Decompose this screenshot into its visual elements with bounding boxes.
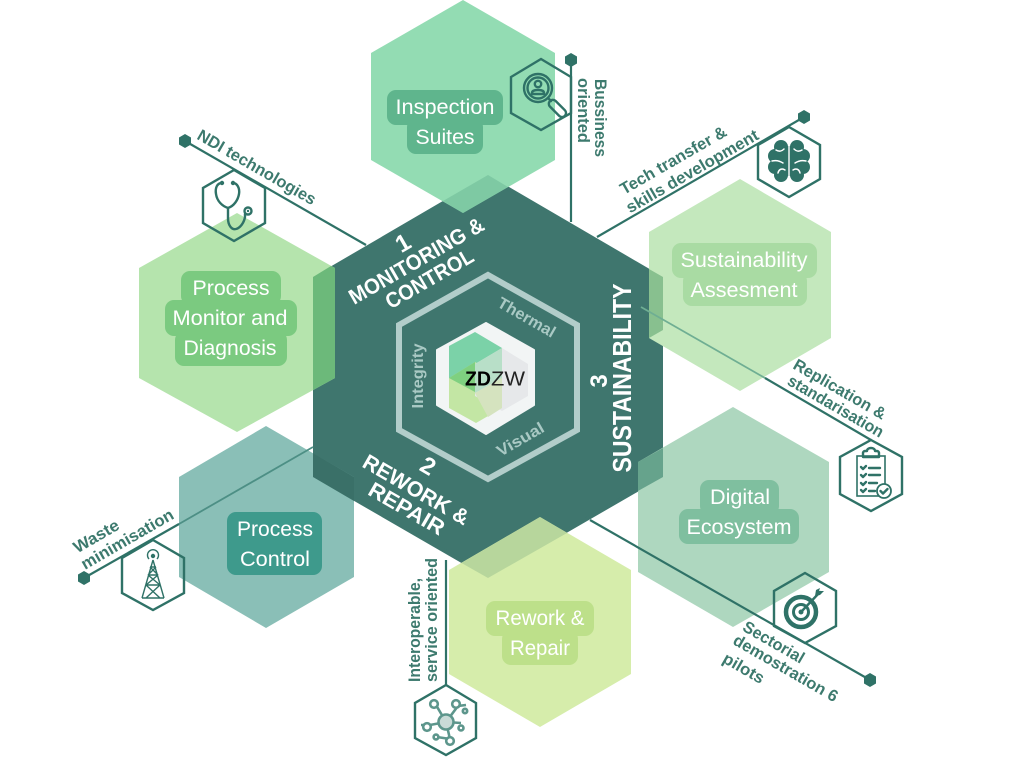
- label: Sectorial demostration 6 pilots: Sectorial: [740, 618, 807, 667]
- label: Bussiness oriented: [574, 78, 609, 157]
- panel: Process Control: Process: [237, 518, 313, 541]
- inner hexagon outline: [399, 275, 577, 479]
- panel: Digital Ecosystem: [638, 407, 829, 627]
- connector: Replication: [641, 307, 871, 440]
- icon: brain: [758, 127, 820, 197]
- icon: network nodes: [415, 685, 476, 755]
- panel: Process Control: [179, 426, 354, 628]
- panel: Sustainability Assesment: Sustainability: [680, 249, 808, 272]
- ZDZW logo: ZW: [491, 368, 525, 390]
- label: Tech transfer and skills development: skills development: [623, 126, 762, 217]
- label: Thermal: Thermal: [494, 295, 558, 341]
- panel: Rework and Repair: Repair: [510, 637, 570, 660]
- panel: Inspection Suites: Inspection: [396, 96, 494, 119]
- panel: Digital Ecosystem: Ecosystem: [686, 516, 792, 539]
- panel: Process Monitor and Diagnosis: Process: [192, 277, 270, 300]
- heading: 2 Rework and Repair: 2: [415, 451, 440, 482]
- label: Waste minimisation: minimisation: [78, 506, 177, 573]
- panel: Rework and Repair: [449, 517, 631, 727]
- heading: 3 Sustainability: [586, 284, 637, 472]
- heading: 1 Monitoring and Control: CONTROL: [381, 244, 478, 314]
- heading: 3 Sustainability: SUSTAINABILITY: [607, 284, 637, 472]
- panel: central hexagon: [315, 177, 661, 576]
- icon: transmission tower: [122, 540, 184, 610]
- label: Interoperable, service oriented: service oriented: [423, 558, 441, 682]
- icon: stethoscope: [203, 170, 265, 241]
- label: Integrity: Integrity: [410, 343, 427, 408]
- label: Interoperable, service oriented: Interoperable,: [406, 578, 424, 682]
- ZDZW logo: [437, 323, 534, 434]
- icon: magnifier person: [511, 59, 571, 130]
- connector: Sectorial demonstration: [590, 520, 876, 687]
- connector: Bussiness oriented: [565, 53, 577, 222]
- ZDZW logo: ZD: [465, 368, 491, 390]
- connector: Waste minimisation: [78, 447, 313, 585]
- heading: 2 Rework and Repair: REPAIR: [364, 478, 449, 541]
- panel: Sustainability Assesment: Assesment: [690, 279, 798, 302]
- panel: Process Monitor and Diagnosis: Monitor and: [172, 307, 288, 330]
- label: Sectorial demostration 6 pilots: demostration 6: [730, 631, 841, 706]
- panel: Inspection Suites: [371, 0, 555, 213]
- label: Bussiness oriented: Bussiness: [591, 79, 609, 157]
- label: Replication and standarisation: Replication &: [790, 356, 889, 424]
- panel: Sustainability Assesment: [649, 179, 831, 391]
- icon: clipboard check: [840, 440, 902, 511]
- panel: Process Control: Control: [240, 548, 310, 571]
- label: Replication and standarisation: standarisation: [784, 372, 887, 441]
- connector: NDI technologies: [179, 134, 366, 245]
- heading: 1 Monitoring and Control: 1: [391, 228, 416, 259]
- connector: Interoperable: [445, 560, 447, 685]
- heading: 1 Monitoring and Control: MONITORING &: [345, 213, 488, 309]
- heading: 3 Sustainability: 3: [586, 374, 613, 388]
- panel: Process Monitor and Diagnosis: [139, 213, 335, 432]
- label: Tech transfer and skills development: Tech transfer &: [617, 123, 730, 198]
- panel: Rework and Repair: Rework &: [496, 607, 584, 630]
- icon: target: [774, 573, 836, 643]
- label: Visual: Visual: [494, 420, 548, 460]
- panel: Process Monitor and Diagnosis: Diagnosis: [184, 337, 276, 360]
- heading: 2 Rework and Repair: REWORK &: [358, 450, 474, 530]
- label: Waste minimisation: Waste: [70, 516, 123, 557]
- label: Interoperable, service oriented: [406, 558, 441, 682]
- label: Sectorial demostration 6 pilots: pilots: [720, 650, 767, 688]
- label: Bussiness oriented: oriented: [574, 78, 592, 143]
- label: NDI technologies: NDI technologies: [194, 126, 319, 209]
- panel: Digital Ecosystem: Digital: [710, 486, 770, 509]
- connector: Tech transfer: [597, 110, 810, 237]
- panel: Inspection Suites: Suites: [416, 126, 474, 149]
